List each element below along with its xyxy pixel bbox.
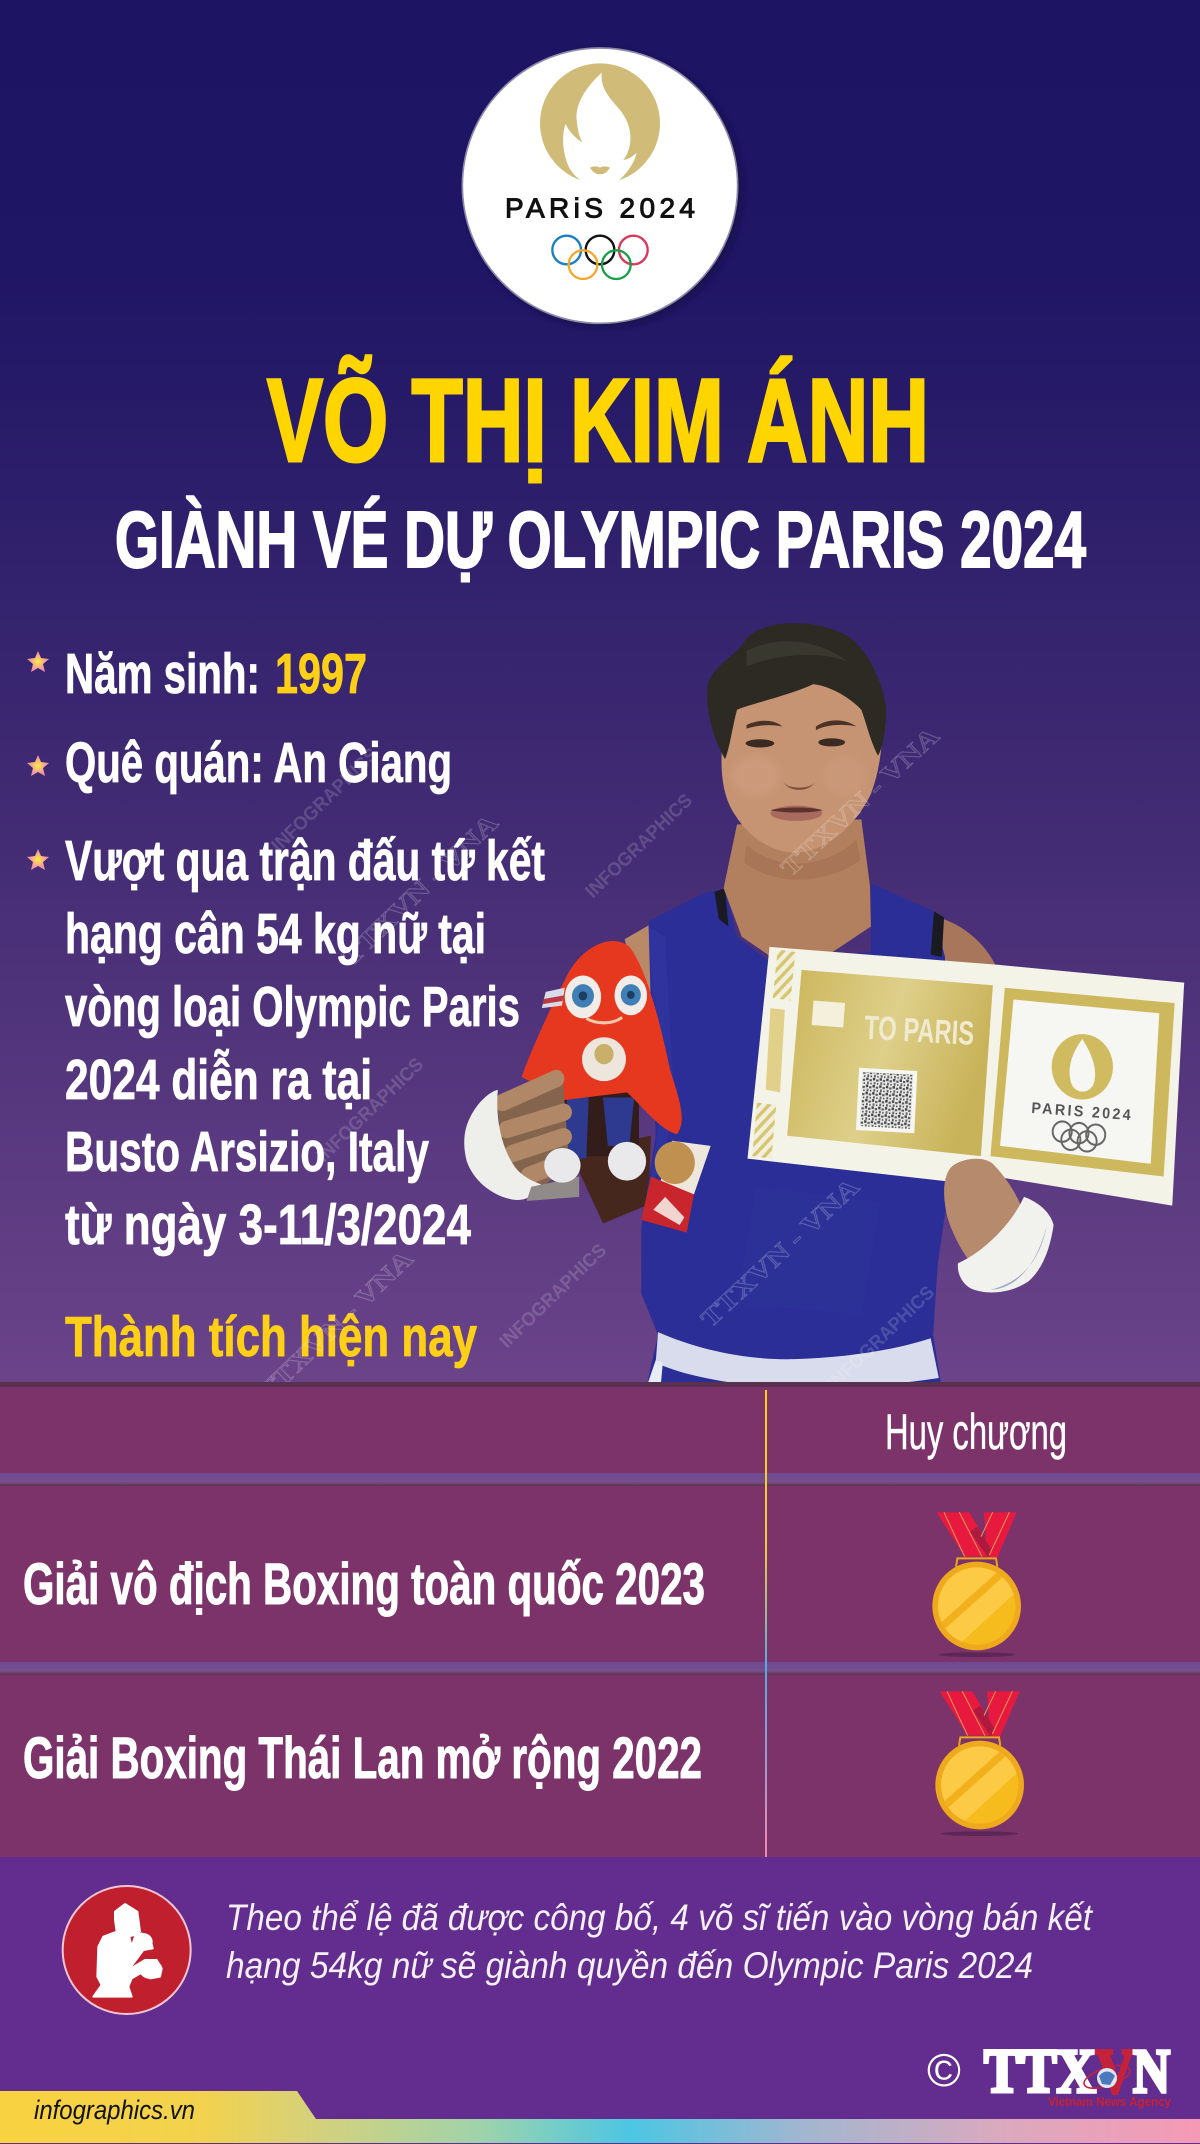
note text: Theo thể lệ đã được công bố, 4 võ sĩ tiến vào vòng bán kết xyxy=(226,1897,1094,1938)
logo: TTXVN: V xyxy=(1096,2038,1134,2106)
ticket xyxy=(748,947,1184,1206)
watermarks: TTXVN - VNA xyxy=(776,723,945,882)
watermarks: INFOGRAPHICS xyxy=(268,744,383,857)
watermarks: TTXVN - VNA xyxy=(696,1174,865,1333)
qualification text block: 2024 diễn ra tại xyxy=(65,1048,372,1112)
medal on ribbon xyxy=(641,1141,711,1233)
ticket: TO PARIS xyxy=(863,1008,975,1052)
ticket: PARIS 2024 xyxy=(1031,1100,1132,1124)
mascot xyxy=(522,941,682,1181)
icon: bullet star qualification xyxy=(27,849,49,870)
birth year: Năm sinh: xyxy=(65,642,260,706)
icon: bullet star hometown xyxy=(27,755,49,776)
logo: TTXVN: TTX xyxy=(984,2038,1096,2106)
icon: gold medal row 2 xyxy=(935,1691,1030,1836)
black straps xyxy=(714,888,728,927)
title: VÕ THỊ KIM ÁNH xyxy=(267,355,929,487)
jersey xyxy=(641,883,947,1388)
copyright symbol: © xyxy=(927,2044,961,2096)
panel: achievements table xyxy=(0,1382,1200,1857)
logo: Paris 2024 emblem: PARiS 2024 xyxy=(505,192,695,223)
hometown: Quê quán: An Giang xyxy=(65,731,452,795)
watermarks: INFOGRAPHICS xyxy=(582,790,697,903)
dark forearm xyxy=(570,1136,651,1223)
watermarks: TTXVN - VNA xyxy=(337,809,503,971)
right hand and wrap xyxy=(944,1159,1054,1292)
rainbow footer strip xyxy=(0,2091,1200,2143)
face xyxy=(721,671,883,853)
watermarks: INFOGRAPHICS xyxy=(496,1240,611,1353)
note text xyxy=(226,1897,1094,1986)
logo: TTXVN xyxy=(984,2038,1171,2109)
logo: TTXVN: N xyxy=(1133,2038,1170,2106)
qualification text block: vòng loại Olympic Paris xyxy=(65,975,520,1039)
watermarks: INFOGRAPHICS xyxy=(824,1282,939,1395)
qualification text block xyxy=(65,829,545,1257)
photo: boxer holding ticket and mascot xyxy=(464,623,1184,1388)
hair xyxy=(707,623,886,759)
neck xyxy=(724,819,871,960)
heading: achievements: Thành tích hiện nay xyxy=(65,1305,477,1369)
qualification text block: Vượt qua trận đấu tứ kết xyxy=(65,829,545,893)
birth year: 1997 xyxy=(275,642,367,706)
note text: hạng 54kg nữ sẽ giành quyền đến Olympic Paris 2024 xyxy=(226,1945,1033,1986)
row 1 label: Giải vô địch Boxing toàn quốc 2023 xyxy=(23,1552,705,1617)
icon: gold medal row 1 xyxy=(932,1512,1027,1657)
qualification text block: hạng cân 54 kg nữ tại xyxy=(65,902,486,966)
watermarks: INFOGRAPHICS xyxy=(313,1054,428,1167)
logo: Paris 2024 emblem xyxy=(462,48,743,328)
icon: bullet star birth year xyxy=(27,651,49,672)
waistband xyxy=(656,1332,939,1387)
panel: footer background xyxy=(0,1857,1200,2144)
watermarks: TTXVN - VNA xyxy=(252,1245,418,1407)
qualification text block: Busto Arsizio, Italy xyxy=(65,1120,429,1184)
shoulders xyxy=(625,924,656,1008)
icon: boxer xyxy=(63,1886,191,2014)
qualification text block: từ ngày 3-11/3/2024 xyxy=(65,1193,471,1257)
row 2 label: Giải Boxing Thái Lan mở rộng 2022 xyxy=(23,1726,702,1791)
site label: infographics.vn xyxy=(34,2095,195,2125)
left hand and wrap xyxy=(464,1074,581,1201)
background xyxy=(0,0,1200,1400)
watermarks xyxy=(252,723,945,1407)
column header: Huy chương xyxy=(885,1404,1067,1460)
logo: TTXVN: Vietnam News Agency xyxy=(1048,2095,1171,2109)
